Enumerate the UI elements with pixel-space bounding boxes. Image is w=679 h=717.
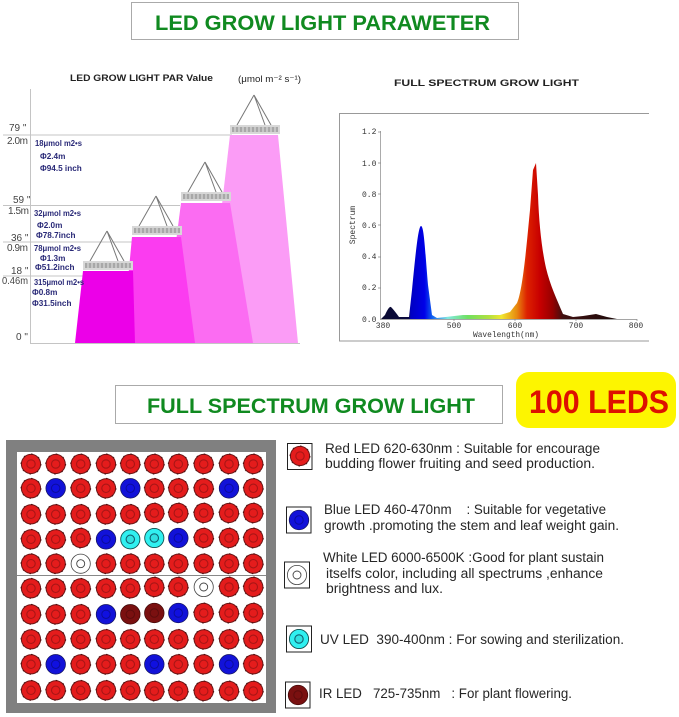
light beam: 0.46m (75, 271, 135, 343)
chart heading: spectrum: FULL SPECTRUM GROW LIGHT (394, 77, 579, 88)
text: red LED description (325, 441, 600, 471)
PAR values at 0.46m: 315μmol m2•s (34, 278, 84, 287)
legend: UV LED (286, 626, 624, 652)
badge: 100 LEDs: 100 LEDS (529, 384, 669, 420)
y axis ticks: 1.0 (362, 160, 377, 169)
height axis labels: 59 " (13, 195, 31, 206)
icon: LED fixture 0.9m (132, 196, 182, 235)
PAR values at 1.5m (34, 209, 81, 240)
light beam: 1.5m (163, 203, 253, 343)
text: blue LED description: Blue LED 460-470nm : Suitable for vegetative (324, 502, 606, 517)
panel: full spectrum chart (340, 77, 649, 341)
y axis title: Spectrum (349, 206, 358, 244)
height axis labels: 0 " (16, 332, 28, 343)
text: blue LED description: growth .promoting the stem and leaf weight gain. (324, 518, 619, 533)
height axis labels: 36 " (11, 233, 29, 244)
text: UV LED description: UV LED 390-400nm : For sowing and sterilization. (320, 632, 624, 647)
height axis labels: 0.9m (7, 243, 28, 254)
text: IR LED description: IR LED 725-735nm : For plant flowering. (319, 686, 572, 701)
panel: LED board layout (6, 440, 276, 713)
text: white LED description: brightness and lux. (326, 581, 443, 596)
light beam: 0.9m (122, 237, 195, 343)
icon: LED fixture 2.0m (230, 95, 280, 134)
PAR values at 2.0m (35, 139, 82, 173)
y axis ticks: 0.4 (362, 253, 377, 262)
chart axes (378, 131, 637, 321)
y axis ticks: 0.6 (362, 222, 377, 231)
PAR values at 0.46m: Φ31.5inch (32, 299, 72, 308)
PAR values at 0.9m (34, 244, 81, 272)
y axis ticks (362, 128, 377, 325)
PAR values at 2.0m: 18μmol m2•s (35, 139, 82, 148)
PAR values at 0.9m: Φ1.3m (40, 254, 65, 263)
badge: 100 LEDs (516, 372, 676, 428)
LED grid: 100 LEDs (21, 454, 263, 701)
legend: IR LED (286, 682, 572, 708)
legend: red LED (288, 441, 600, 471)
PAR values at 1.5m: Φ78.7inch (36, 231, 76, 240)
y axis ticks: 1.2 (362, 128, 377, 137)
height axis labels: 79 " (9, 123, 27, 134)
heading: full spectrum grow light (116, 386, 502, 424)
icon: LED fixture 1.5m (181, 162, 231, 201)
chart axes and height guide lines (3, 89, 300, 344)
PAR values at 0.9m: Φ51.2inch (35, 263, 74, 272)
light beam: 2.0m (206, 135, 298, 343)
icon: white LED (284, 562, 310, 588)
board surface (17, 452, 266, 703)
height axis labels (2, 123, 31, 343)
panel: PAR value chart (2, 73, 301, 344)
y axis ticks: 0.0 (362, 316, 377, 325)
text: white LED description: White LED 6000-6500K :Good for plant sustain (323, 550, 604, 565)
PAR values at 0.9m: 78μmol m2•s (34, 244, 81, 253)
chart unit label: (μmol m⁻² s⁻¹) (238, 74, 301, 85)
x axis ticks: 800 (629, 322, 643, 331)
text: red LED description: Red LED 620-630nm : Suitable for encourage (325, 441, 600, 456)
PAR values at 1.5m: Φ2.0m (37, 221, 62, 230)
PAR values at 2.0m: Φ2.4m (40, 152, 65, 161)
x axis ticks: 380 (376, 322, 390, 331)
y axis ticks: 0.2 (362, 284, 377, 293)
title: LED grow light parameter: LED GROW LIGHT PARAWETER (155, 11, 490, 35)
text: red LED description: budding flower fruiting and seed production. (325, 456, 595, 471)
title: LED grow light parameter (132, 2, 518, 40)
chart frame (340, 114, 649, 341)
icon: LED fixture 0.46m (83, 231, 133, 270)
text: white LED description: itselfs color, including all spectrums ,enhance (326, 566, 603, 581)
height axis labels: 1.5m (8, 206, 29, 217)
height axis labels: 18 " (11, 266, 29, 277)
PAR values at 0.46m (32, 278, 84, 308)
text: blue LED description (324, 502, 619, 533)
height axis labels: 0.46m (2, 276, 28, 287)
x axis ticks: 700 (569, 322, 583, 331)
heading: full spectrum grow light: FULL SPECTRUM GROW LIGHT (147, 395, 475, 418)
chart heading: PAR value: LED GROW LIGHT PAR Value (70, 73, 213, 84)
spectrum area (381, 163, 617, 319)
icon: UV LED (286, 626, 312, 652)
x axis ticks: 500 (447, 322, 461, 331)
PAR values at 0.46m: Φ0.8m (32, 288, 57, 297)
board frame (6, 440, 276, 713)
height axis labels: 2.0m (7, 136, 28, 147)
icon: IR LED (286, 682, 310, 708)
legend: white LED (284, 550, 604, 596)
x axis ticks: 600 (508, 322, 522, 331)
x axis title: Wavelength(nm) (473, 331, 539, 340)
y axis ticks: 0.8 (362, 191, 377, 200)
PAR values at 1.5m: 32μmol m2•s (34, 209, 81, 218)
icon: blue LED (286, 507, 311, 533)
x axis ticks (376, 322, 643, 331)
icon: red LED (288, 444, 312, 470)
legend: blue LED (286, 502, 619, 533)
PAR values at 2.0m: Φ94.5 inch (40, 164, 82, 173)
text: white LED description (323, 550, 604, 596)
